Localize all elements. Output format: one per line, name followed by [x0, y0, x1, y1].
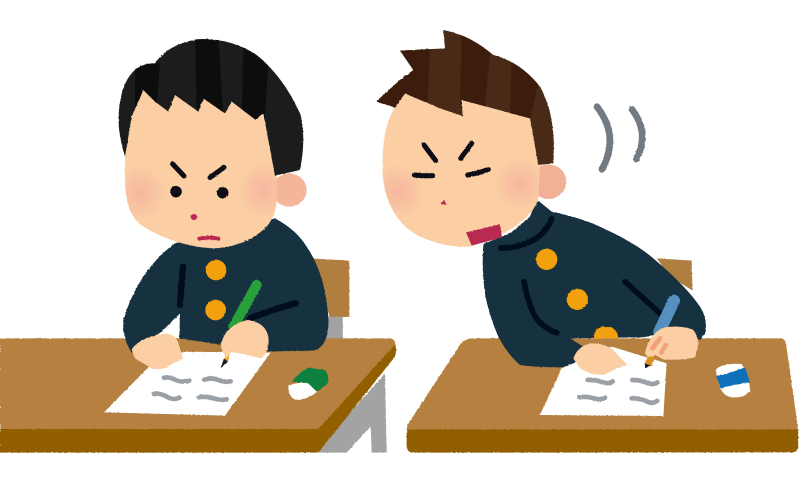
left student ear: [272, 173, 307, 207]
right student buttons: [536, 249, 588, 310]
right chair: [657, 258, 693, 291]
right student cheeks: [384, 165, 539, 212]
left student mouth: [199, 232, 218, 245]
right student and desk: [370, 30, 798, 453]
right student third button: [594, 327, 618, 338]
right student jacket: [483, 199, 706, 367]
right student ear: [530, 164, 566, 199]
left student jacket: [123, 218, 328, 353]
right desk: [407, 338, 798, 453]
left student jacket creases: [180, 267, 296, 318]
right text lines: [579, 380, 657, 403]
left pencil: [221, 285, 257, 368]
left eraser: [288, 368, 328, 400]
left student buttons: [205, 260, 226, 320]
right student open mouth: [466, 224, 502, 246]
left student cheeks: [125, 170, 277, 214]
right blue pencil: [645, 301, 674, 368]
left paper: [104, 352, 271, 416]
right student nose: [441, 199, 447, 205]
right student closed eyes and brows: [414, 143, 488, 176]
left student eyes and brows: [170, 164, 228, 198]
right eraser: [716, 364, 750, 397]
right student hair: [370, 30, 554, 165]
right student collar and creases: [501, 219, 660, 333]
right student face: [382, 93, 540, 247]
right student hands: [573, 327, 698, 375]
left student face: [125, 87, 277, 248]
left student hands: [132, 320, 269, 369]
left student nose: [191, 214, 197, 220]
right paper: [540, 347, 667, 416]
left desk legs: [315, 373, 387, 453]
left chair: [310, 258, 350, 341]
motion lines: [597, 107, 642, 169]
left desk: [0, 338, 396, 453]
left student and desk: [0, 37, 396, 453]
left student hair: [118, 37, 303, 176]
right fingers: [652, 338, 666, 353]
left text lines: [154, 377, 231, 400]
